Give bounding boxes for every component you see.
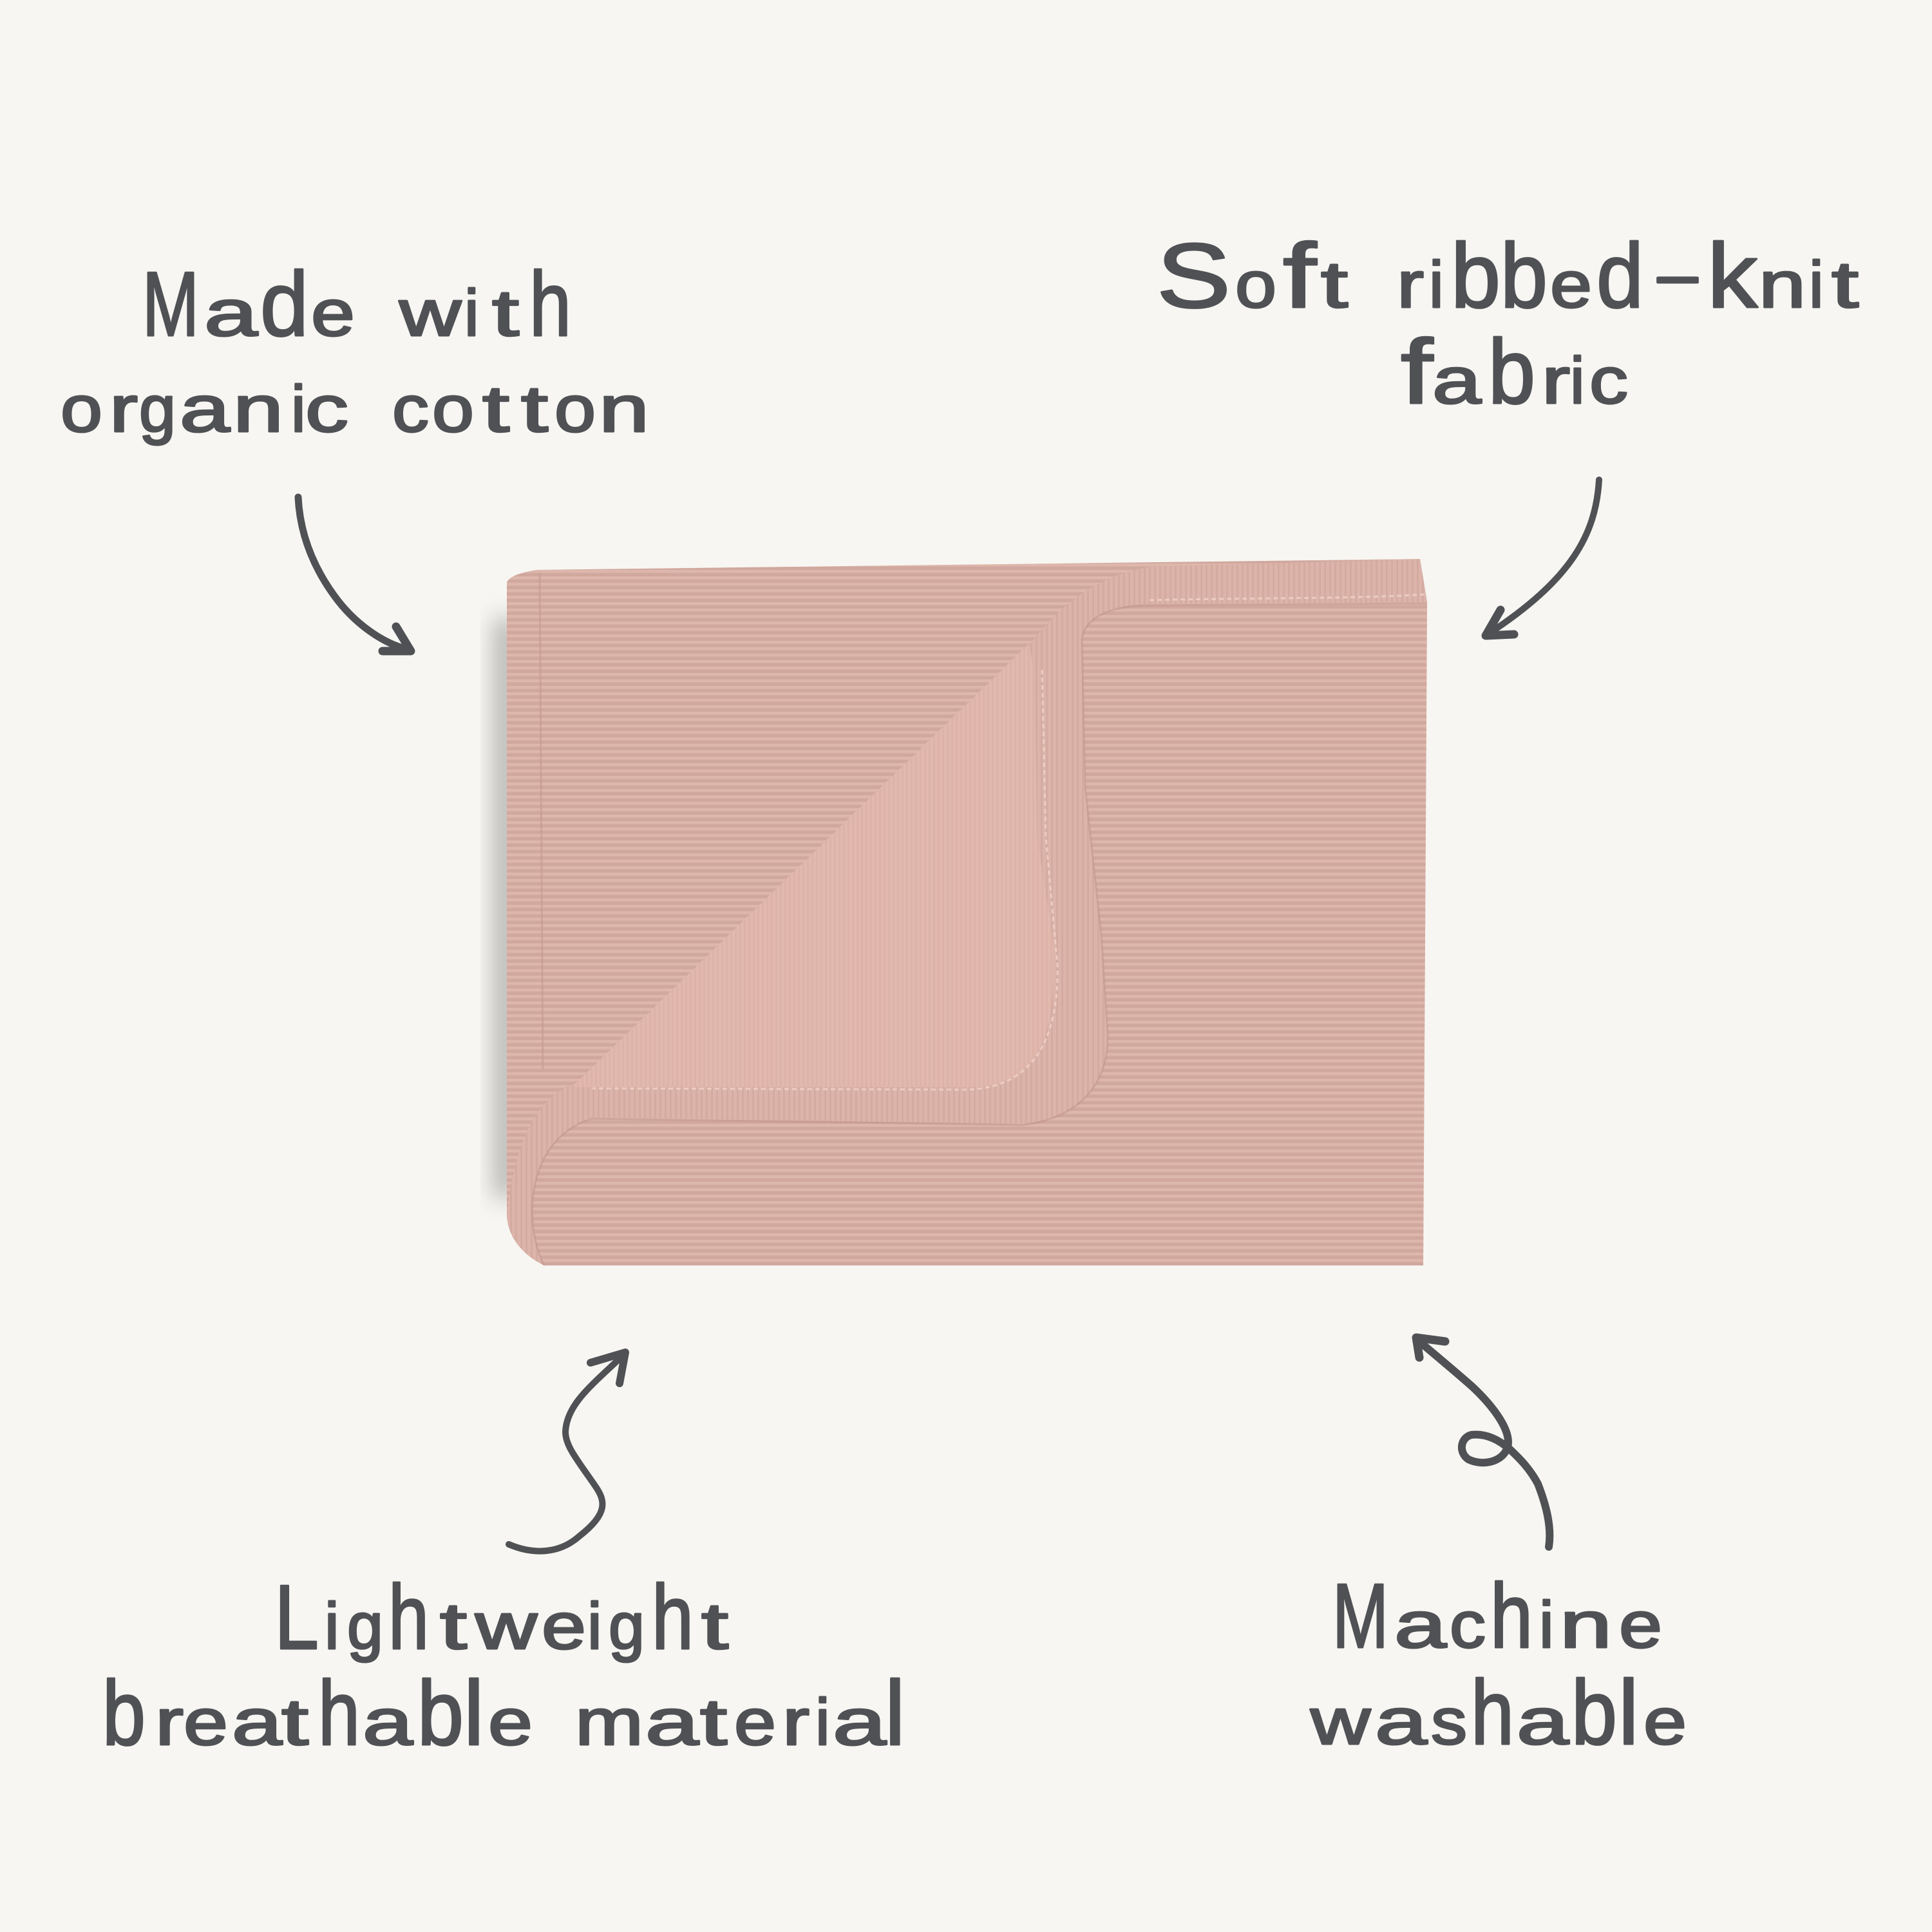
heading: soft ribbed-knit fabric: f: [1283, 225, 1317, 327]
heading: made with organic cotton: M: [142, 253, 199, 355]
heading: made with organic cotton: t: [521, 372, 548, 446]
heading: lightweight breathable material: l: [464, 1662, 484, 1765]
heading: lightweight breathable material: m: [575, 1685, 643, 1759]
heading: made with organic cotton: i: [464, 276, 479, 350]
arrow: soft ribbed-knit: [1486, 480, 1599, 636]
heading: lightweight breathable material: L: [274, 1566, 319, 1669]
heading: lightweight breathable material: e: [542, 1589, 586, 1663]
heading: machine washable: a: [1394, 1588, 1446, 1662]
heading: soft ribbed-knit fabric: n: [1759, 248, 1806, 321]
heading: lightweight breathable material: t: [701, 1589, 728, 1663]
heading: machine washable: h: [1471, 1662, 1514, 1764]
heading: soft ribbed-knit fabric: i: [1570, 344, 1585, 417]
heading: soft ribbed-knit fabric: c: [1589, 344, 1628, 417]
heading: machine washable: l: [1618, 1662, 1639, 1764]
heading: soft ribbed-knit fabric: -: [1652, 238, 1703, 312]
heading: lightweight breathable material: l: [885, 1662, 905, 1765]
heading: lightweight breathable material: a: [363, 1685, 413, 1759]
heading: lightweight breathable material: i: [587, 1589, 602, 1663]
heading: lightweight breathable material: a: [645, 1685, 699, 1759]
heading: lightweight breathable material: a: [833, 1685, 886, 1759]
heading: lightweight breathable material: h: [318, 1662, 360, 1765]
blanket body: [507, 559, 1427, 1265]
heading: machine washable: e: [1643, 1685, 1687, 1758]
band edge crease: [532, 603, 1427, 1265]
heading: lightweight breathable material: e: [184, 1685, 228, 1759]
heading: lightweight breathable material: g: [347, 1589, 383, 1663]
heading: soft ribbed-knit fabric: r: [1397, 248, 1424, 321]
heading: soft ribbed-knit fabric: k: [1707, 225, 1758, 327]
heading: lightweight breathable material: h: [652, 1566, 694, 1669]
heading: machine washable: a: [1375, 1685, 1427, 1758]
heading: made with organic cotton: r: [109, 372, 138, 446]
heading: made with organic cotton: g: [139, 372, 176, 446]
heading: soft ribbed-knit fabric: i: [1809, 248, 1824, 321]
heading: machine washable: s: [1431, 1685, 1467, 1758]
heading: soft ribbed-knit fabric: a: [1432, 344, 1481, 417]
heading: machine washable: M: [1332, 1565, 1388, 1667]
heading: soft ribbed-knit fabric: S: [1157, 225, 1231, 327]
heading: soft ribbed-knit fabric: b: [1501, 225, 1548, 327]
heading: machine washable: w: [1310, 1685, 1370, 1758]
heading: soft ribbed-knit fabric: d: [1596, 225, 1643, 327]
heading: made with organic cotton: o: [554, 372, 596, 446]
heading: lightweight breathable material: t: [700, 1685, 727, 1759]
heading: machine washable: h: [1490, 1565, 1533, 1667]
heading: made with organic cotton: c: [305, 372, 348, 446]
heading: soft ribbed-knit fabric: t: [1832, 248, 1859, 321]
callout: lightweight breathable material: [77, 1352, 905, 1765]
heading: made with organic cotton: a: [204, 276, 258, 350]
heading: lightweight breathable material: b: [102, 1662, 146, 1765]
heading: made with organic cotton: a: [180, 372, 230, 446]
stitching lines: [592, 594, 1425, 1090]
heading: made with organic cotton: d: [260, 253, 308, 355]
heading: lightweight breathable material: g: [609, 1589, 645, 1663]
heading: machine washable: e: [1619, 1588, 1662, 1662]
heading: lightweight breathable material: w: [475, 1589, 537, 1663]
heading: made with organic cotton: i: [291, 372, 306, 446]
heading: made with organic cotton: t: [482, 372, 509, 446]
heading: made with organic cotton: n: [599, 372, 649, 446]
heading: lightweight breathable material: i: [815, 1685, 830, 1759]
heading: soft ribbed-knit fabric: r: [1542, 344, 1570, 417]
callout: made with organic cotton: [39, 253, 649, 651]
heading: lightweight breathable material: a: [232, 1685, 282, 1759]
heading: lightweight breathable material: b: [417, 1662, 464, 1765]
heading: machine washable: a: [1517, 1685, 1569, 1758]
heading: lightweight breathable material: r: [155, 1685, 184, 1759]
heading: lightweight breathable material: i: [325, 1589, 339, 1663]
heading: soft ribbed-knit fabric: e: [1550, 248, 1592, 321]
heading: made with organic cotton: e: [311, 276, 355, 350]
arrow: organic cotton: [298, 497, 411, 651]
folded flap band: [507, 559, 1427, 1265]
heading: soft ribbed-knit fabric: f: [1401, 321, 1434, 423]
heading: made with organic cotton: h: [529, 253, 571, 355]
callout: machine washable: [1288, 1338, 1687, 1764]
heading: made with organic cotton: c: [392, 372, 429, 446]
heading: soft ribbed-knit fabric: t: [1321, 248, 1348, 321]
flap underside triangle: [572, 644, 1054, 1087]
heading: machine washable: c: [1450, 1588, 1486, 1662]
heading: made with organic cotton: w: [399, 276, 461, 350]
callout: soft ribbed-knit fabric: [1157, 225, 1859, 636]
heading: lightweight breathable material: t: [440, 1589, 467, 1663]
heading: lightweight breathable material: t: [281, 1685, 308, 1759]
heading: soft ribbed-knit fabric: b: [1488, 321, 1535, 423]
heading: machine washable: n: [1560, 1588, 1612, 1662]
arrow: machine washable: [1416, 1338, 1549, 1547]
heading: machine washable: b: [1571, 1662, 1617, 1764]
heading: made with organic cotton: o: [61, 372, 102, 446]
heading: soft ribbed-knit fabric: i: [1429, 248, 1444, 321]
heading: lightweight breathable material: h: [388, 1566, 429, 1669]
heading: made with organic cotton: o: [432, 372, 474, 446]
blanket shadow: [495, 618, 518, 1198]
heading: soft ribbed-knit fabric: b: [1451, 225, 1501, 327]
heading: made with organic cotton: n: [233, 372, 283, 446]
arrow: lightweight: [509, 1352, 625, 1551]
heading: lightweight breathable material: r: [782, 1685, 810, 1759]
heading: lightweight breathable material: e: [734, 1685, 776, 1759]
heading: lightweight breathable material: e: [488, 1685, 533, 1759]
heading: made with organic cotton: t: [492, 276, 519, 350]
heading: soft ribbed-knit fabric: o: [1235, 248, 1276, 321]
heading: machine washable: i: [1539, 1588, 1554, 1662]
blanket product photo: [495, 559, 1427, 1265]
